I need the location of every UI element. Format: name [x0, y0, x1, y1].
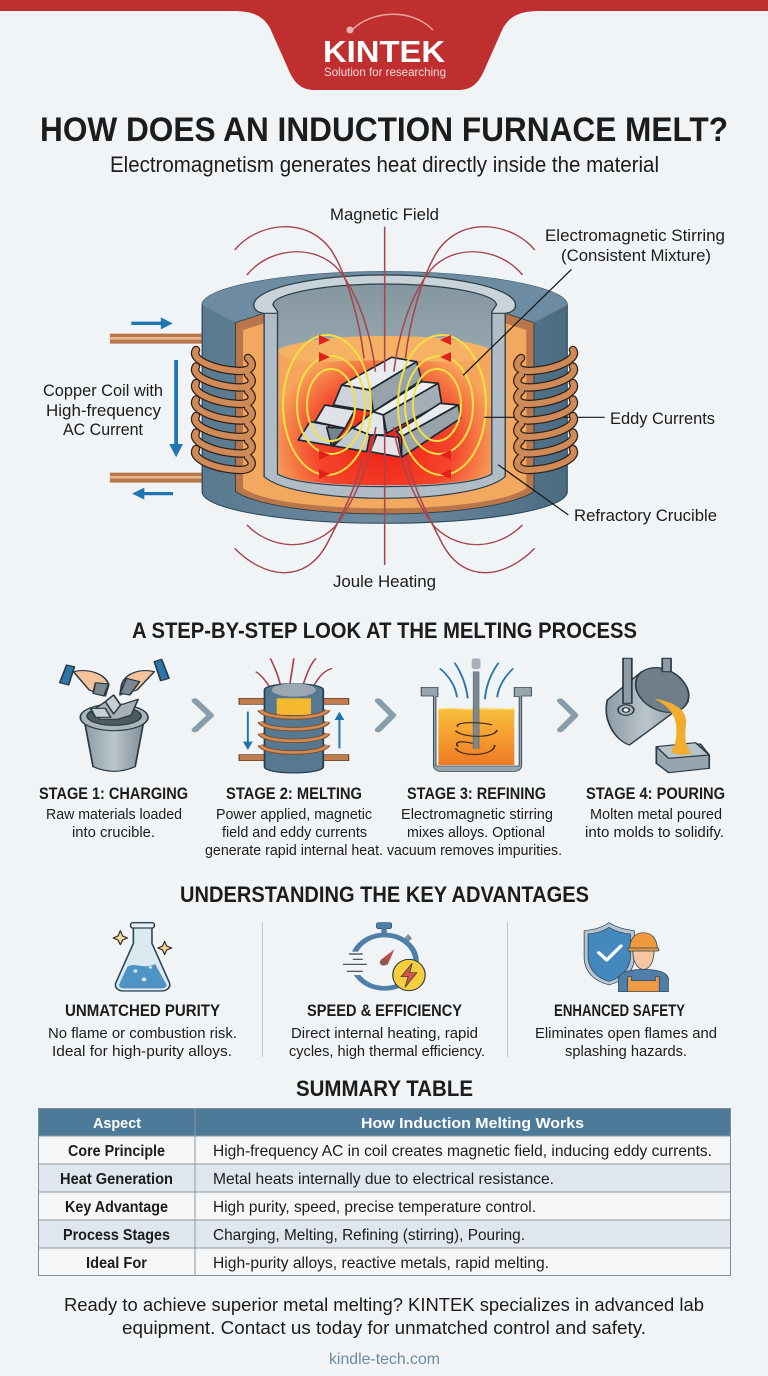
summary table [38, 1108, 731, 1276]
magnetic field lines [235, 227, 535, 573]
current direction arrows [131, 317, 183, 500]
summary table: High purity, speed, precise temperature control. [213, 1199, 536, 1216]
summary table: Charging, Melting, Refining (stirring), Pouring. [213, 1227, 525, 1244]
advantage 1 text [48, 1001, 237, 1060]
stage 4 text: STAGE 4: POURING [586, 784, 725, 803]
label: copper coil: Copper Coil with [43, 381, 163, 400]
label: magnetic field: Magnetic Field [330, 205, 439, 224]
furnace outer body [202, 272, 567, 523]
icon: charging bucket and hands [60, 659, 169, 771]
website: kindle-tech.com [329, 1351, 440, 1368]
crucible interior wall [273, 284, 496, 487]
icon: shield and worker [584, 923, 668, 992]
label: electromagnetic stirring [545, 226, 725, 265]
stage 3 text: STAGE 3: REFINING [407, 784, 546, 803]
stage 2 text: field and eddy currents [222, 824, 367, 841]
call to action: equipment. Contact us today for unmatched control and safety. [122, 1318, 646, 1338]
header logo tab [0, 0, 768, 90]
summary table: Metal heats internally due to electrical resistance. [213, 1171, 554, 1188]
furnace diagram [110, 227, 605, 573]
label: copper coil [43, 381, 163, 439]
summary table: Aspect [93, 1115, 141, 1132]
leader lines [463, 269, 605, 515]
icon: pouring ladle [606, 658, 709, 773]
summary table: Heat Generation [60, 1171, 173, 1188]
advantage 2 text: cycles, high thermal efficiency. [289, 1043, 485, 1060]
heading: summary table: SUMMARY TABLE [296, 1076, 473, 1101]
stage 3 text: Electromagnetic stirring [401, 806, 553, 823]
advantage 1 text: No flame or combustion risk. [48, 1025, 237, 1042]
stage 1 text: STAGE 1: CHARGING [39, 784, 188, 803]
header logo tab: KINTEK [323, 34, 446, 69]
advantage icons [113, 923, 668, 992]
summary table: High-purity alloys, reactive metals, rapid melting. [213, 1255, 549, 1272]
stage 1 text [39, 784, 188, 841]
furnace shell and crucible [110, 272, 567, 523]
advantage 3 text [535, 1001, 717, 1060]
advantage 1 text: UNMATCHED PURITY [65, 1001, 221, 1020]
stage 3 text: mixes alloys. Optional [407, 824, 545, 841]
heading: step by step: A STEP-BY-STEP LOOK AT THE MELTING PROCESS [132, 618, 637, 643]
magnetic field lines and labels [131, 227, 605, 573]
stage 2 text: generate rapid internal heat. [205, 842, 383, 859]
icon: flask [113, 923, 172, 991]
label: joule heating: Joule Heating [333, 572, 436, 591]
summary table: Key Advantage [65, 1199, 168, 1216]
advantage 3 text: splashing hazards. [565, 1043, 687, 1060]
call to action: Ready to achieve superior metal melting? KINTEK specializes in advanced lab [64, 1295, 704, 1315]
coil right [517, 350, 574, 470]
stage 4 text [585, 784, 725, 841]
heading: key advantages: UNDERSTANDING THE KEY ADVANTAGES [180, 882, 589, 907]
summary table: Ideal For [86, 1255, 147, 1272]
label: copper coil: High-frequency [46, 401, 161, 420]
call to action [64, 1295, 704, 1338]
metal ingots [298, 357, 461, 457]
icon: stopwatch [343, 923, 425, 991]
crucible rim [254, 275, 516, 313]
summary table: High-frequency AC in coil creates magnetic field, inducing eddy currents. [213, 1143, 712, 1160]
cutaway insulation layer [235, 313, 534, 514]
icon: melting coil [239, 658, 349, 773]
advantage 2 text [289, 1001, 485, 1060]
furnace top rim surface [202, 272, 567, 323]
header logo tab: Solution for researching [324, 65, 446, 79]
stage 3 text: vacuum removes impurities. [387, 842, 562, 859]
stage 1 text: Raw materials loaded [46, 806, 182, 823]
subtitle: Electromagnetism generates heat directly inside the material [110, 152, 659, 177]
stage 2 text: Power applied, magnetic [216, 806, 372, 823]
summary table: Process Stages [63, 1227, 170, 1244]
summary table: How Induction Melting Works [361, 1115, 584, 1132]
refractory crucible wall [264, 312, 505, 498]
label: eddy currents: Eddy Currents [610, 409, 715, 428]
advantage 1 text: Ideal for high-purity alloys. [52, 1043, 232, 1060]
stage 4 text: into molds to solidify. [585, 824, 724, 841]
chevron 1 [195, 701, 211, 730]
chevron 3 [560, 701, 575, 730]
red current arrows [319, 335, 451, 479]
summary table: Core Principle [68, 1143, 165, 1160]
copper inlet and outlet pipes [110, 334, 203, 483]
stage 4 text: Molten metal poured [590, 806, 722, 823]
title: HOW DOES AN INDUCTION FURNACE MELT? [40, 111, 728, 149]
icon: refining crucible [421, 658, 531, 772]
advantage 3 text: ENHANCED SAFETY [554, 1001, 686, 1020]
advantage 2 text: SPEED & EFFICIENCY [307, 1001, 463, 1020]
stage 1 text: into crucible. [72, 824, 155, 841]
stage 3 text [387, 784, 562, 859]
advantage 2 text: Direct internal heating, rapid [291, 1025, 478, 1042]
stage 2 text: STAGE 2: MELTING [226, 784, 362, 803]
advantage 3 text: Eliminates open flames and [535, 1025, 717, 1042]
molten metal [278, 336, 491, 485]
label: electromagnetic stirring: (Consistent Mixture) [561, 246, 711, 265]
stage icons [60, 658, 709, 773]
label: electromagnetic stirring: Electromagnetic Stirring [545, 226, 725, 245]
label: copper coil: AC Current [63, 420, 143, 439]
coil left [195, 350, 252, 470]
chevron 2 [378, 701, 393, 730]
label: refractory crucible: Refractory Crucible [574, 506, 717, 525]
molten metal surface [278, 336, 491, 362]
eddy current loops [283, 335, 486, 475]
stage 2 text [205, 784, 383, 859]
